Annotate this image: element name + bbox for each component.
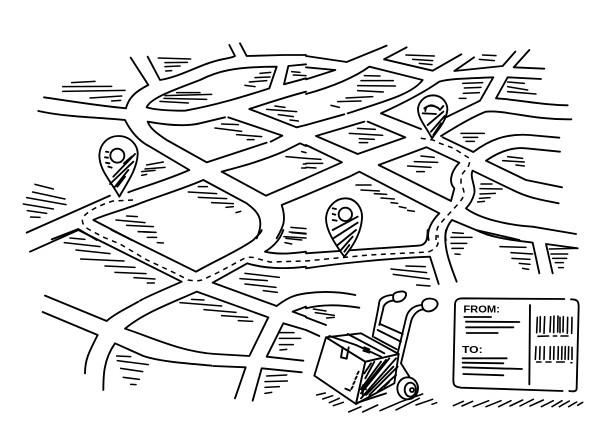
shipping label card [453,298,583,407]
ground shadow [317,393,437,412]
pin: left location marker [99,136,138,197]
divider [527,305,533,384]
from heading: FROM: [463,305,500,316]
card outline [453,298,579,391]
dashed delivery route [82,138,470,281]
map block hatching [23,55,577,393]
ground hatching under card [453,399,583,407]
street map: north-east roads [306,46,576,240]
parcel box [314,333,399,404]
pin: right location marker [418,95,447,138]
to heading: TO: [462,345,483,356]
wheel [397,377,418,399]
hand truck with parcel [314,292,438,412]
from address lines [464,317,519,333]
street map: south-west roads [30,230,306,401]
upper barcode [537,316,572,336]
pin: centre location marker [326,198,362,257]
lower barcode [535,347,572,363]
hand truck frame [373,292,438,377]
to address lines [463,358,522,375]
street map: south-east roads [306,230,578,336]
street map: north-west roads [27,43,306,240]
